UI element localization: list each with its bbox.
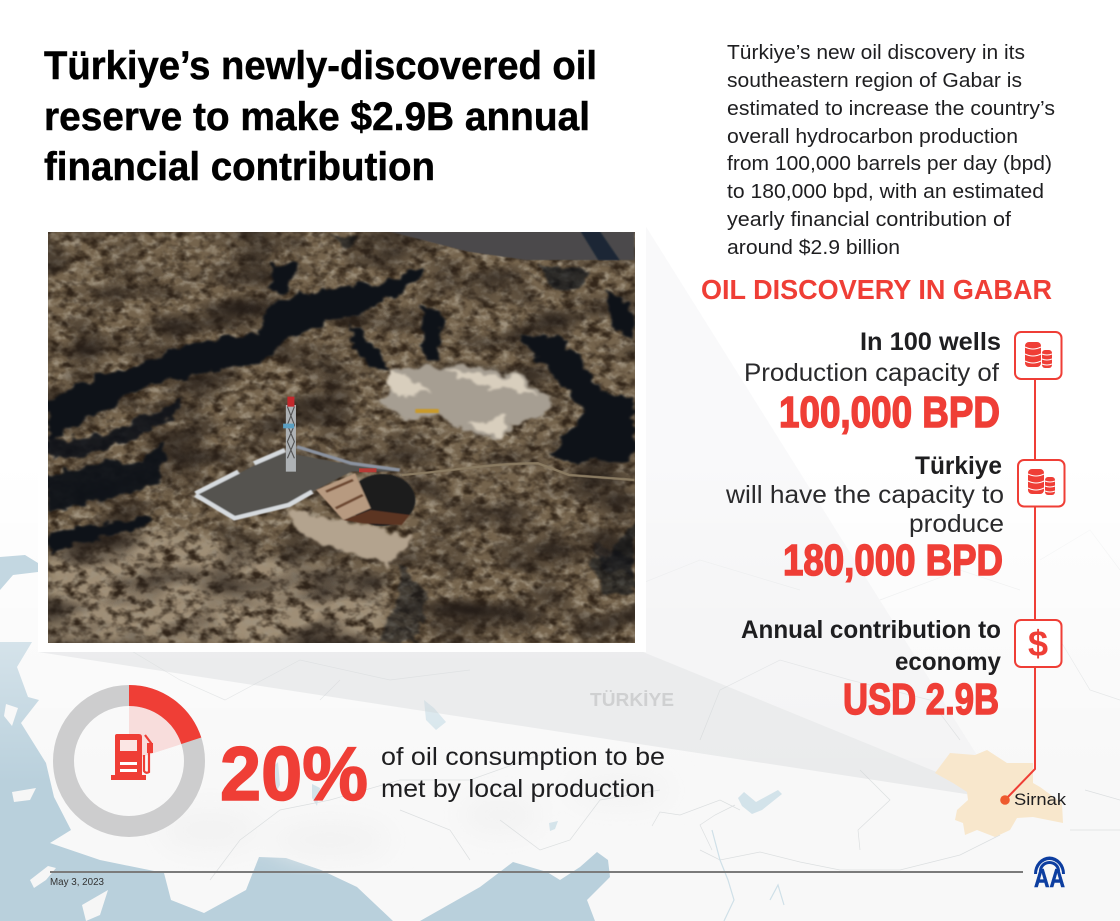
stat: Türkiye capacity	[725, 452, 1004, 585]
Sirnak marker and label: Sirnak	[1014, 790, 1067, 809]
heading	[44, 44, 597, 189]
icon: dollar sign: $	[1028, 623, 1048, 664]
heading: reserve to make $2.9B annual	[44, 95, 590, 139]
intro text block: around $2.9 billion	[727, 237, 900, 259]
map label: Türkiye: TÜRKİYE	[590, 690, 674, 710]
section heading: oil discovery in Gabar: OIL DISCOVERY IN GABAR	[701, 274, 1052, 305]
date: May 3, 2023	[50, 877, 104, 888]
icon: dollar sign	[1015, 620, 1062, 667]
logo: Anadolu Agency: AA	[1034, 863, 1065, 893]
lit foreground slope	[49, 528, 390, 643]
intro text block: southeastern region of Gabar is	[727, 70, 1022, 92]
timeline connector	[1005, 379, 1035, 800]
stat: Türkiye capacity: Türkiye	[915, 452, 1002, 480]
icon: barrels for Türkiye capacity	[1018, 460, 1064, 506]
stat: 100 wells: 100,000 BPD	[779, 388, 1000, 437]
stat: annual contribution	[741, 616, 1001, 724]
stat: annual contribution: USD 2.9B	[843, 675, 999, 724]
caption for 20 percent: of oil consumption to be	[381, 743, 665, 771]
photo: aerial view of the oil drilling site	[38, 225, 646, 652]
sea areas	[0, 642, 610, 921]
intro text block: overall hydrocarbon production	[727, 126, 1018, 148]
land patches on the sea	[4, 704, 108, 921]
stat: annual contribution: economy	[895, 648, 1001, 676]
faint terrain	[160, 776, 670, 858]
access road	[402, 463, 634, 480]
Sirnak province highlight	[935, 750, 1063, 837]
intro text block	[727, 42, 1055, 259]
derrick	[286, 405, 296, 472]
stat: Türkiye capacity: 180,000 BPD	[783, 536, 1003, 585]
footer rule	[50, 871, 1023, 873]
lakes and rivers	[272, 700, 782, 831]
stat: 100 wells: In 100 wells	[860, 328, 1001, 356]
intro text block: Türkiye’s new oil discovery in its	[727, 42, 1025, 64]
stat: annual contribution: Annual contribution to	[741, 616, 1001, 644]
stat: 100 wells: Production capacity of	[744, 359, 999, 387]
intro text block: estimated to increase the country’s	[727, 98, 1055, 120]
intro text block: yearly financial contribution of	[727, 209, 1011, 231]
big figure: 20%: 20%	[220, 732, 368, 817]
stat: Türkiye capacity: will have the capacity to	[725, 481, 1004, 509]
stat: 100 wells	[744, 328, 1001, 437]
quarry clearing	[289, 365, 550, 565]
caption for 20 percent	[381, 743, 665, 803]
icon: barrels in 100 wells	[1015, 332, 1062, 379]
waste pit	[349, 474, 415, 526]
projection cone from the photo to Sirnak	[38, 225, 1005, 800]
heading: financial contribution	[44, 145, 435, 189]
caption for 20 percent: met by local production	[381, 775, 655, 803]
rubble slope below the site	[289, 508, 413, 565]
terrain shadows	[49, 235, 634, 643]
stat: Türkiye capacity: produce	[909, 510, 1004, 538]
drilling pad	[196, 447, 415, 526]
northern coast sea	[0, 555, 38, 590]
heading: Türkiye’s newly-discovered oil	[44, 44, 597, 88]
haze on far ridge	[390, 232, 634, 260]
icon: fuel pump	[111, 734, 153, 780]
intro text block: to 180,000 bpd, with an estimated	[727, 181, 1044, 203]
intro text block: from 100,000 barrels per day (bpd)	[727, 153, 1052, 175]
donut chart: 20 percent	[64, 696, 194, 826]
